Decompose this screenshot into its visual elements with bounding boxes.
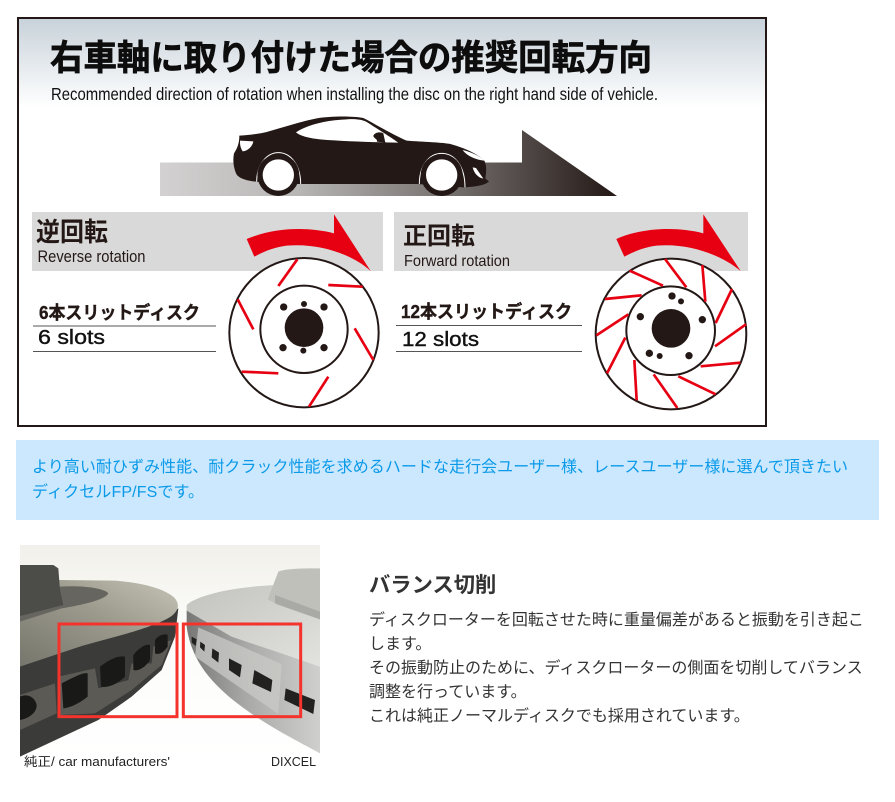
photo: disc side comparison xyxy=(20,545,320,769)
text: 12 slots: 12 slots xyxy=(402,329,479,351)
left hub xyxy=(20,565,63,616)
panel: reverse rotation label xyxy=(32,212,383,271)
icon: 12-slot disc with arrow xyxy=(596,214,746,409)
panel: forward rotation label xyxy=(394,212,748,271)
title: 右車軸に取り付けた場合の推奨回転方向 xyxy=(50,39,652,78)
heading: balance cutting: バランス切削 xyxy=(369,573,496,597)
left disc top xyxy=(20,580,178,667)
left disc recess xyxy=(20,586,108,622)
caption: manufacturer: 純正/ car manufacturers' xyxy=(24,755,170,769)
subtitle: Recommended direction of rotation when installing the disc on the right hand side of vehicle. xyxy=(51,84,658,104)
text block: balance cutting description xyxy=(369,610,864,725)
text block: balance cutting description: 調整を行っています。 xyxy=(369,683,527,701)
panel: reverse rotation label: Reverse rotation xyxy=(38,247,146,266)
right disc edge xyxy=(187,611,320,753)
panel: reverse rotation label: 逆回転 xyxy=(36,217,108,247)
text: 12 slots: 12本スリットディスク xyxy=(401,301,572,322)
callout: blue message band: ディクセルFP/FSです。 xyxy=(32,482,204,501)
text: 6 slots: 6 slots xyxy=(38,327,105,349)
right disc top xyxy=(187,585,320,667)
icon: car silhouette xyxy=(233,117,489,196)
left vents xyxy=(20,640,172,730)
left disc edge xyxy=(20,608,178,757)
tail light xyxy=(240,141,253,151)
wheels xyxy=(257,153,301,184)
text block: balance cutting description: その振動防止のために、ディスクローターの側面を切削してバランス xyxy=(369,658,863,677)
callout: blue message band xyxy=(16,440,879,520)
text block: balance cutting description: します。 xyxy=(369,635,431,653)
callout: blue message band: より高い耐ひずみ性能、耐クラック性能を求めるハードな走行会ユーザー様、レースユーザー様に選んで頂きたい xyxy=(32,458,848,476)
seat xyxy=(373,132,385,143)
icon: 6-slot disc with arrow xyxy=(229,214,379,407)
text block: balance cutting description: ディスクローターを回転させた時に重量偏差があると振動を引き起こ xyxy=(369,610,864,629)
head light xyxy=(463,150,485,161)
right machined band xyxy=(195,627,282,714)
panel: forward rotation label: 正回転 xyxy=(403,223,475,250)
right hub xyxy=(268,568,320,619)
text block: balance cutting description: これは純正ノーマルディスクでも採用されています。 xyxy=(369,706,750,725)
header gradient xyxy=(19,19,765,107)
text: 6 slots xyxy=(33,302,216,352)
arrow: direction of travel xyxy=(160,130,617,196)
caption: DIXCEL: DIXCEL xyxy=(271,755,316,769)
window xyxy=(296,119,398,143)
right vents xyxy=(192,637,315,714)
highlight boxes xyxy=(59,624,177,717)
text: 6 slots: 6本スリットディスク xyxy=(39,302,200,323)
text: 12 slots xyxy=(396,301,582,352)
panel: forward rotation label: Forward rotation xyxy=(404,253,510,270)
panel: rotation direction diagram xyxy=(18,18,766,426)
